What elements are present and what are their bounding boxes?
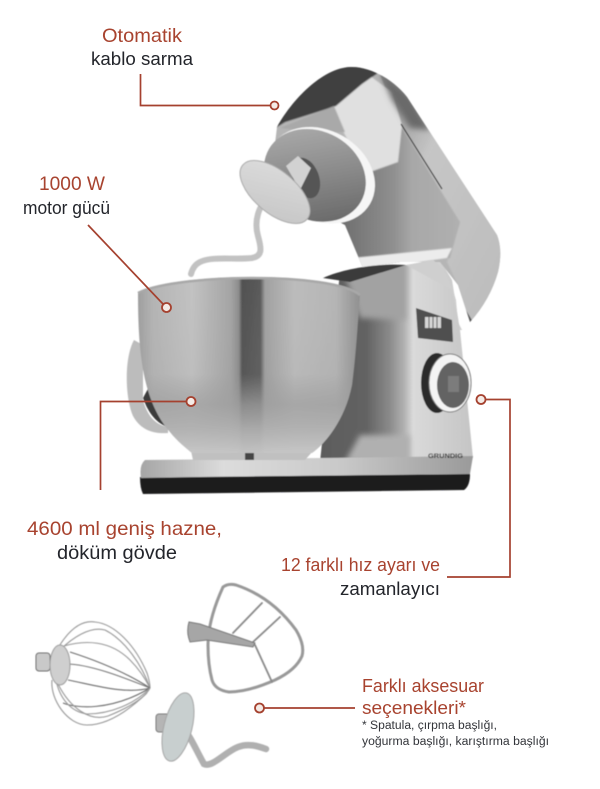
bowl body	[135, 275, 363, 455]
callout: speed settings and timer: 12 farklı hız ayarı ve	[281, 555, 440, 575]
callout: accessory options: Farklı aksesuar	[362, 676, 484, 696]
neck reflection	[358, 248, 452, 268]
callout: accessory options	[255, 676, 549, 748]
control knob	[421, 353, 471, 413]
accessory: flat beater	[188, 584, 303, 692]
mixer front face with white ring	[247, 107, 393, 244]
callout: accessory options: yoğurma başlığı, karıştırma başlığı	[362, 736, 549, 748]
shell groove line	[401, 124, 442, 189]
base black underside	[140, 474, 470, 494]
callout: motor power: 1000 W	[39, 174, 105, 195]
bowl handle	[127, 340, 172, 433]
mid body	[341, 129, 455, 258]
bowl foot	[191, 451, 313, 460]
display panel	[416, 308, 453, 342]
callout: motor power: motor gücü	[23, 198, 110, 218]
callout: automatic cord winding	[91, 25, 278, 110]
callout: accessory options: * Spatula, çırpma başlığı,	[362, 720, 497, 732]
stand mixer	[127, 60, 510, 494]
bright highlight block	[328, 76, 402, 172]
accessory: whisk	[36, 622, 150, 725]
head underside dark sliver	[323, 265, 406, 282]
callout: speed settings and timer	[281, 395, 510, 599]
lower dark panel edge	[466, 311, 472, 322]
mixer column	[320, 258, 475, 463]
top dark panel	[276, 66, 378, 128]
column top edge right	[406, 260, 462, 330]
mixer spindle	[286, 154, 325, 202]
bowl rim	[138, 278, 360, 295]
callout: automatic cord winding: kablo sarma	[91, 49, 194, 69]
callout: accessory options: seçenekleri*	[362, 698, 466, 718]
callout: bowl capacity	[27, 397, 222, 564]
dark upper edge	[380, 72, 430, 130]
dough hook on mixer	[191, 149, 321, 274]
base plate	[140, 456, 473, 478]
callout: automatic cord winding: Otomatik	[102, 25, 182, 47]
brand label: GRUNDIG	[428, 453, 463, 460]
callout: speed settings and timer: zamanlayıcı	[340, 579, 440, 599]
outer shell panel	[380, 74, 500, 318]
callout: bowl capacity: 4600 ml geniş hazne,	[27, 518, 222, 540]
accessory: dough hook	[156, 690, 266, 765]
callout: motor power	[23, 174, 171, 312]
callout: bowl capacity: döküm gövde	[57, 542, 177, 564]
mixer head	[275, 66, 501, 322]
grey band under dark panel	[280, 106, 345, 132]
